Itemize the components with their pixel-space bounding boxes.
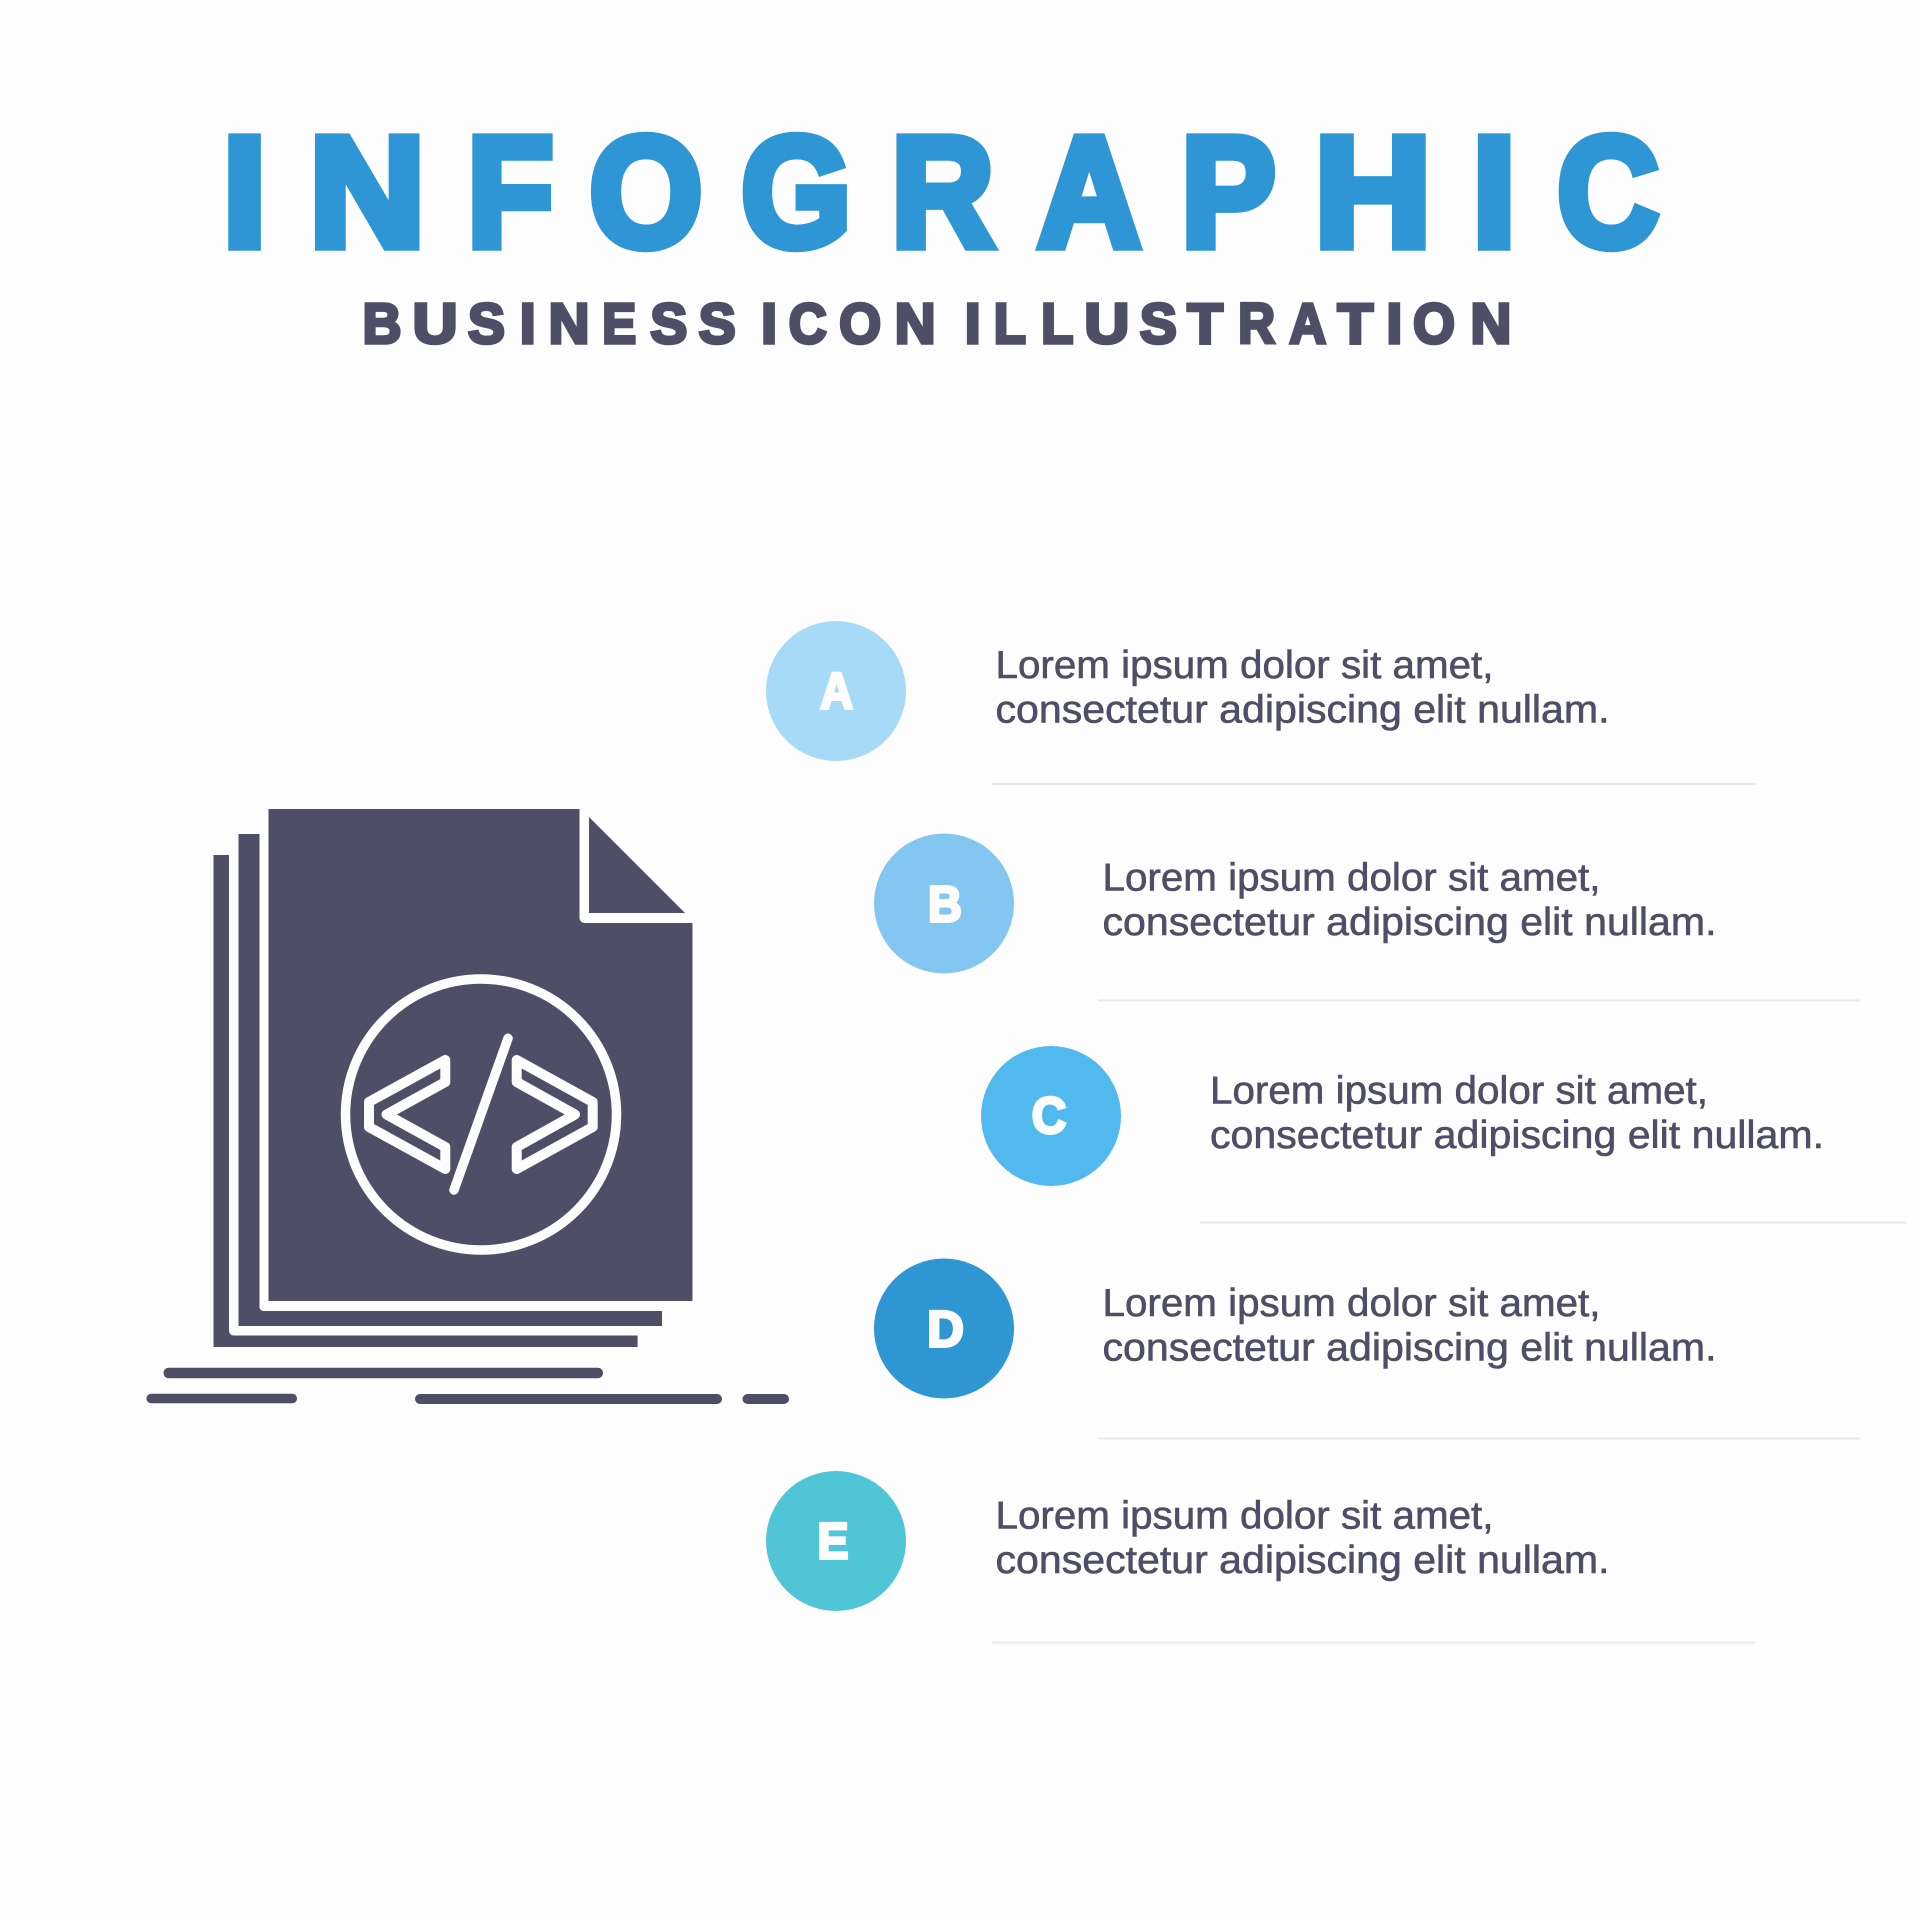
- subtitle: S: [650, 292, 687, 355]
- subtitle: I: [965, 292, 981, 355]
- row C: [981, 1046, 1824, 1186]
- row E: [766, 1471, 1610, 1611]
- subtitle: I: [1386, 292, 1402, 355]
- left angle bracket: [369, 1060, 445, 1169]
- subtitle: S: [1140, 292, 1177, 355]
- text A: Lorem ipsum dolor sit amet,: [996, 644, 1494, 687]
- subtitle: U: [1084, 292, 1129, 355]
- badge D: [874, 1258, 1014, 1398]
- badge E: [766, 1471, 906, 1611]
- row D: [874, 1258, 1716, 1398]
- subtitle: N: [549, 292, 589, 355]
- ground line lower middle: [415, 1394, 722, 1404]
- letter E: E: [818, 1512, 848, 1570]
- title: H: [1314, 106, 1431, 280]
- text E: Lorem ipsum dolor sit amet,: [996, 1494, 1494, 1538]
- middle page: [238, 834, 662, 1326]
- subtitle: O: [1413, 292, 1455, 355]
- badge C: [981, 1046, 1121, 1186]
- title: P: [1181, 106, 1276, 280]
- ground line lower left: [146, 1394, 297, 1403]
- title: O: [590, 106, 702, 280]
- subtitle: C: [789, 292, 827, 355]
- subtitle: L: [994, 292, 1026, 355]
- title: G: [741, 106, 851, 280]
- text D: Lorem ipsum dolor sit amet,: [1102, 1282, 1600, 1325]
- ground line dash: [742, 1394, 789, 1404]
- subtitle: L: [1041, 292, 1073, 355]
- code circle: [346, 979, 616, 1250]
- title: I: [1472, 106, 1516, 280]
- letter A: A: [820, 662, 853, 720]
- text D: consectetur adipiscing elit nullam.: [1102, 1327, 1716, 1370]
- badge A: [766, 621, 906, 761]
- badge B: [874, 834, 1014, 974]
- letter D: D: [927, 1300, 964, 1358]
- subtitle: I: [761, 292, 777, 355]
- back page: [214, 855, 638, 1347]
- title: N: [309, 106, 425, 280]
- front page: [268, 809, 692, 1301]
- subtitle: N: [895, 292, 936, 355]
- slash: [454, 1038, 508, 1190]
- right angle bracket: [517, 1060, 593, 1169]
- subtitle: O: [839, 292, 881, 355]
- subtitle: E: [602, 292, 636, 355]
- subtitle: B: [363, 292, 401, 355]
- text A: consectetur adipiscing elit nullam.: [996, 689, 1610, 732]
- title: F: [467, 106, 553, 280]
- text C: Lorem ipsum dolor sit amet,: [1210, 1070, 1708, 1112]
- text B: Lorem ipsum dolor sit amet,: [1102, 856, 1600, 900]
- text B: consectetur adipiscing elit nullam.: [1102, 901, 1716, 944]
- letter B: B: [928, 876, 962, 932]
- row B: [874, 834, 1716, 974]
- title: A: [1038, 106, 1140, 280]
- subtitle: A: [1289, 292, 1326, 355]
- subtitle: T: [1338, 292, 1373, 355]
- subtitle: I: [520, 292, 536, 355]
- title: R: [892, 106, 994, 280]
- row A: [766, 621, 1610, 761]
- subtitle: U: [413, 292, 458, 355]
- letter C: C: [1032, 1087, 1066, 1144]
- subtitle: S: [468, 292, 505, 355]
- subtitle: S: [699, 292, 736, 355]
- ground line upper: [164, 1368, 603, 1378]
- folded corner: [589, 817, 685, 913]
- subtitle: N: [1470, 292, 1511, 355]
- text C: consectetur adipiscing elit nullam.: [1210, 1114, 1824, 1157]
- subtitle: T: [1187, 292, 1223, 355]
- subtitle: R: [1238, 292, 1275, 355]
- text E: consectetur adipiscing elit nullam.: [996, 1539, 1610, 1582]
- title: I: [223, 106, 266, 280]
- title: C: [1557, 106, 1658, 280]
- icon: stacked code files: [146, 809, 789, 1404]
